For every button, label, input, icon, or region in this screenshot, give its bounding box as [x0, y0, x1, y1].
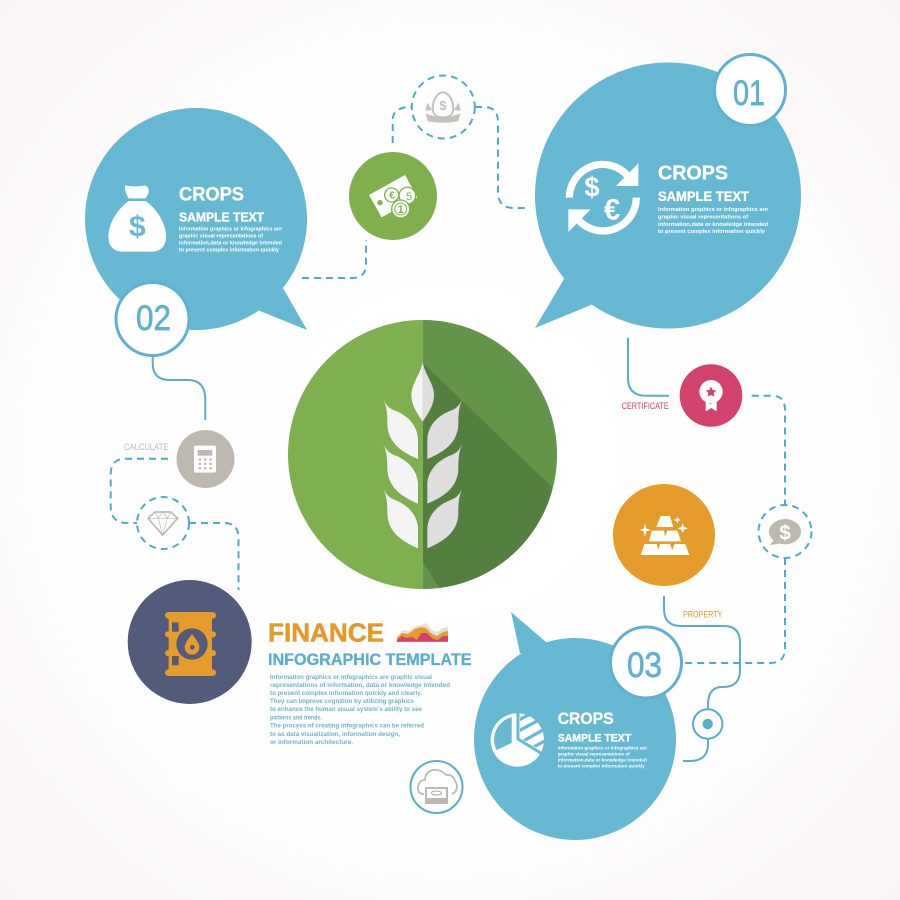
number badge 03: 03 [627, 646, 662, 685]
icon: certificate [680, 364, 742, 427]
icon: cash and coins: 5 [406, 191, 412, 203]
icon: gold bars [613, 484, 715, 586]
subheading: sample text: SAMPLE TEXT [179, 210, 264, 225]
text block: description: to present complex information quickly [179, 248, 279, 254]
connector: nest egg to right bubble [475, 107, 525, 208]
subheading: sample text: SAMPLE TEXT [558, 733, 631, 745]
text block: infographic description [270, 674, 450, 746]
text block: infographic description: or information architecture. [270, 739, 353, 746]
icon: oil barrel [128, 580, 252, 704]
connector: gold to target [664, 596, 740, 709]
text block: infographic description: representations of information, data or knowledge intended [270, 682, 450, 689]
icon: diamond [137, 497, 189, 549]
connector: left bubble to cash [302, 240, 366, 278]
wheat leaves [383, 362, 462, 548]
icon: money bag [108, 185, 166, 252]
title: finance: FINANCE [268, 620, 384, 648]
connector: right bubble to certificate [628, 338, 669, 396]
connector: calculator to diamond [111, 459, 168, 523]
connector: target to bottom bubble [683, 739, 708, 761]
icon: nest egg: $ [439, 98, 447, 113]
icon: dollar speech bubble [758, 505, 812, 558]
number badge 03 [610, 627, 682, 698]
text block: infographic description: to as data visualization, information design, [270, 731, 400, 738]
label: certificate: CERTIFICATE [622, 401, 669, 411]
heading: crops: CROPS [658, 162, 728, 184]
text block: description: Information graphics or infographics are [179, 226, 282, 232]
text block: description: information,data or knowledge intended [179, 240, 282, 246]
text block: infographic description: to enhance the human visual system’s ability to see [270, 706, 423, 713]
text block: description [658, 207, 769, 235]
panel: speech bubble 01 [535, 62, 801, 328]
text block: infographic description: Information graphics or infographics are graphic visual [270, 674, 432, 681]
connector: dollar bubble to 03 [683, 558, 785, 663]
text block: description: information,data or knowledge intended [658, 222, 769, 228]
number badge 01: 01 [733, 74, 765, 113]
text block: description: graphic visual representations of [558, 752, 630, 756]
text block: description [558, 746, 647, 768]
icon: calculator [176, 430, 234, 488]
text block: infographic description: to present complex information quickly and clearly. [270, 690, 422, 697]
connector: certificate to dollar bubble [752, 396, 785, 505]
text block: description [179, 226, 282, 254]
panel: speech bubble 02 [85, 108, 307, 330]
central wheat icon [288, 320, 563, 600]
text block: description: to present complex information quickly [658, 229, 766, 235]
icon: dollar speech bubble: $ [779, 521, 791, 544]
connector: 02 to calculator [153, 357, 205, 420]
number badge 02: 02 [136, 299, 171, 338]
text block: description: graphic visual representations of [179, 234, 263, 240]
icon: area chart [397, 623, 448, 642]
panel: speech bubble 03 [474, 612, 676, 840]
icon: currency exchange: $ [584, 172, 600, 203]
label: property: PROPERTY [683, 610, 722, 620]
icon: nest egg [412, 76, 475, 138]
heading: crops: CROPS [558, 710, 614, 728]
connector: diamond to barrel [189, 523, 238, 590]
number badge 01 [714, 54, 786, 126]
text block: description: to present complex information quickly [558, 764, 645, 768]
subtitle: infographic template: INFOGRAPHIC TEMPLATE [268, 650, 472, 669]
icon: cash and coins [349, 152, 437, 240]
subheading: sample text: SAMPLE TEXT [658, 189, 750, 204]
icon: target node [693, 709, 722, 739]
text block: description: graphic visual representations of [658, 214, 748, 220]
text block: infographic description: The process of creating infographics can be referred [270, 722, 424, 730]
icon: cloud printer [410, 761, 462, 813]
heading: crops: CROPS [179, 184, 244, 206]
text block: infographic description: patterns and trends. [270, 714, 322, 722]
text block: description: Information graphics or infographics are [658, 207, 768, 213]
icon: currency exchange [568, 163, 638, 232]
icon: currency exchange: € [604, 194, 620, 227]
text block: infographic description: They can improve cognition by utilizing graphics [270, 698, 415, 705]
connector: cash to nest egg [393, 107, 412, 143]
label: calculate: CALCULATE [124, 442, 168, 452]
text block: description: information,data or knowledge intended [558, 758, 647, 762]
number badge 02 [116, 282, 189, 356]
icon: cash and coins: € [389, 191, 395, 202]
icon: money bag: $ [129, 210, 146, 243]
icon: pie chart [490, 713, 544, 767]
text block: description: Information graphics or infographics are [558, 746, 647, 750]
icon: cash and coins: 1 [398, 204, 404, 216]
